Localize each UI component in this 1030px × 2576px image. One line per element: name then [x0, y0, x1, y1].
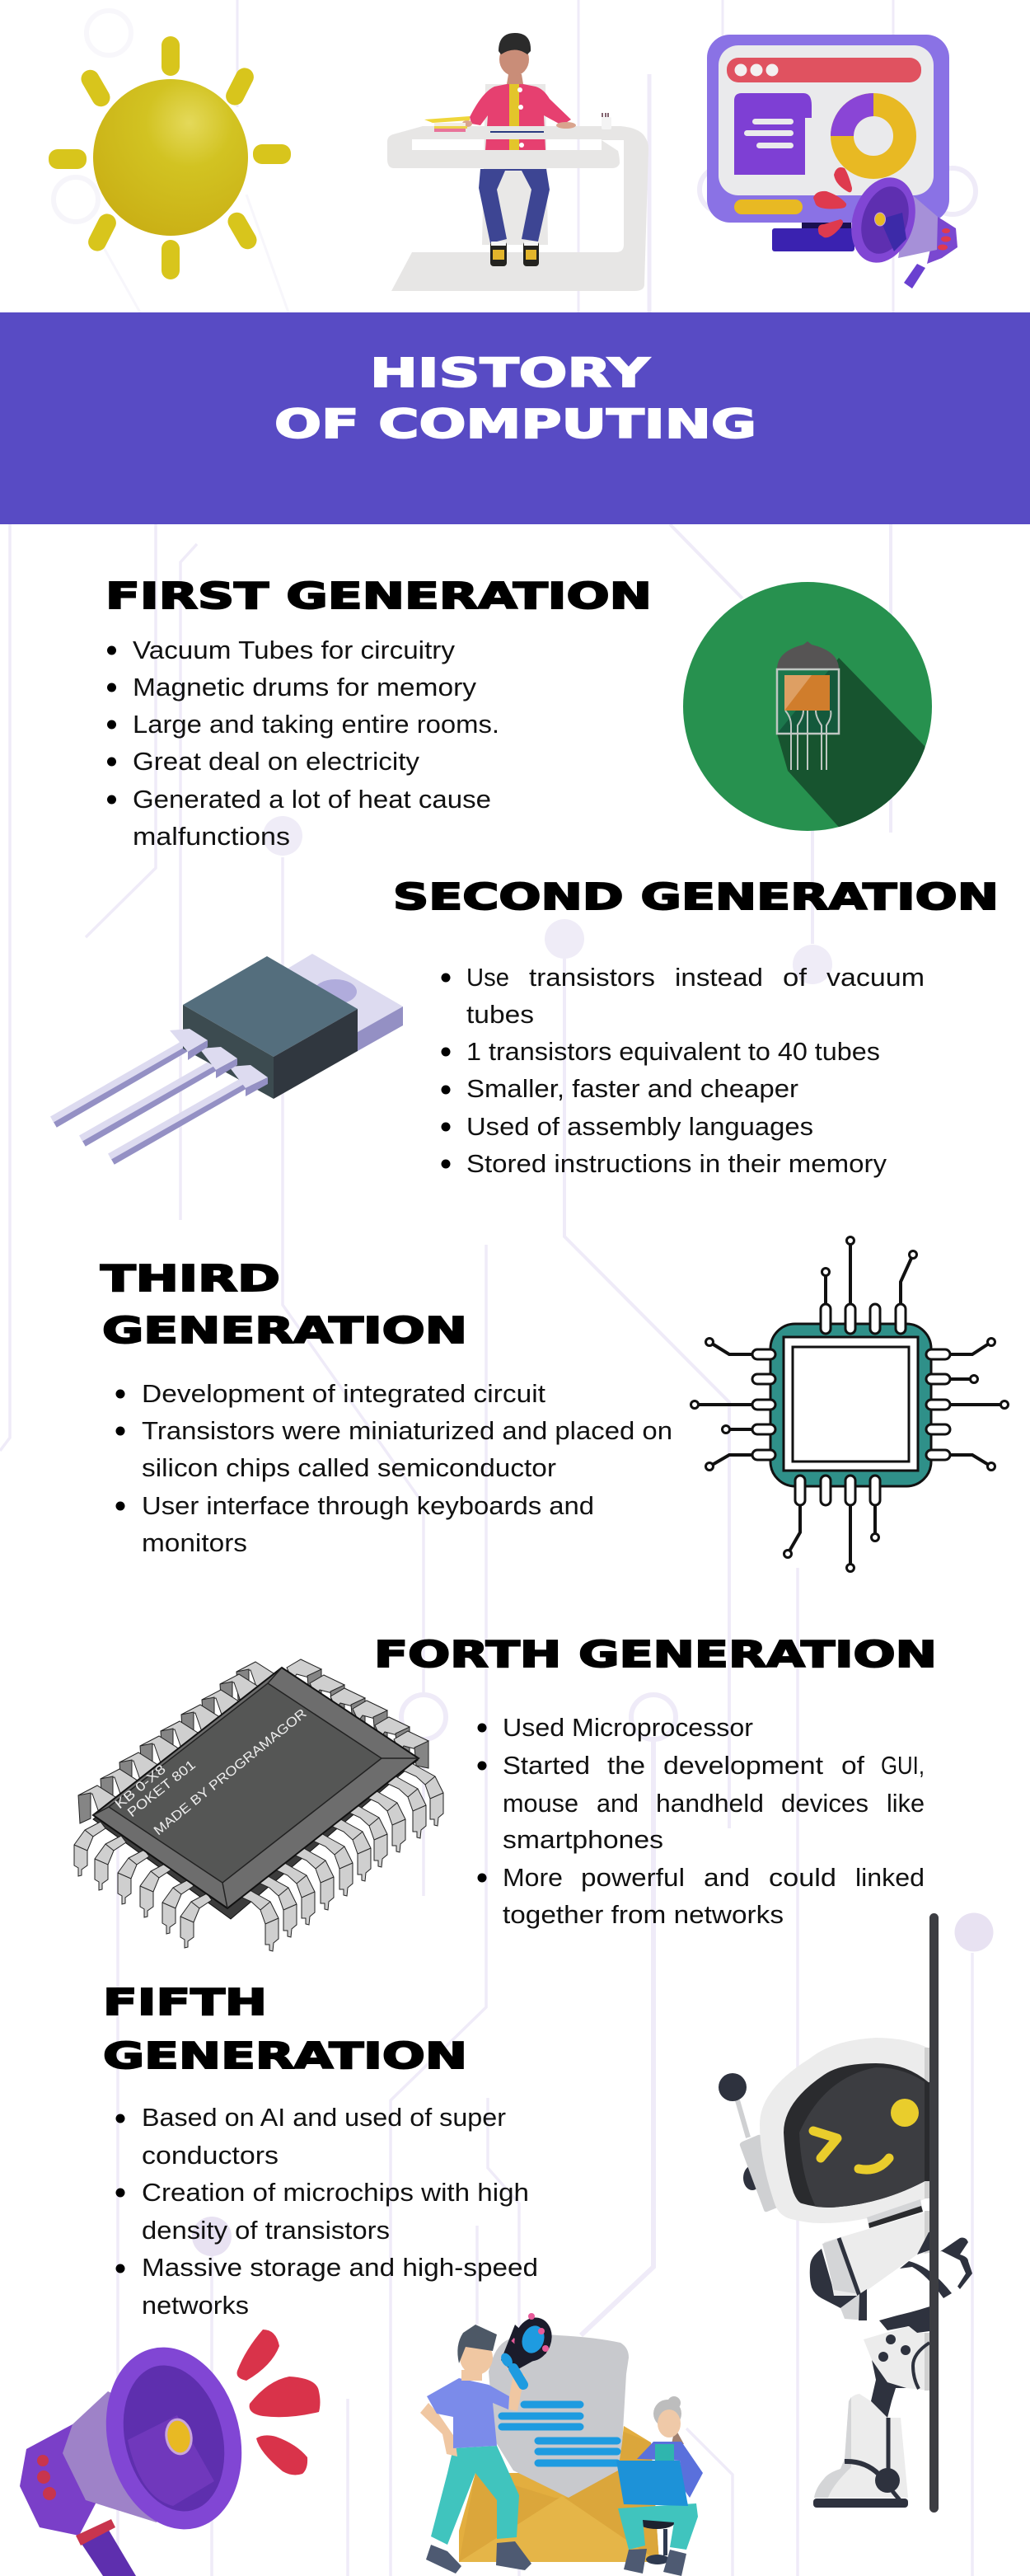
bullet list: fifth generation: Massive storage and high-speed: [142, 2253, 538, 2282]
bullet list: fourth generation: Started: [503, 1751, 590, 1780]
bullet list: first generation: Vacuum Tubes for circuitry: [133, 636, 456, 664]
pole: [929, 1913, 939, 2513]
bullet list: fourth generation: smartphones: [503, 1825, 663, 1854]
heading: fifth generation: [103, 1982, 467, 2077]
bullet list: fourth generation: devices: [781, 1789, 868, 1818]
bullet list: third generation: silicon chips called semiconductor: [142, 1453, 556, 1482]
icon: transistor: [52, 954, 403, 1161]
bullet list: first generation: [107, 636, 499, 851]
heading: second generation: SECOND GENERATION: [393, 876, 999, 918]
icon: microprocessor chip: POKET 801: [125, 1758, 199, 1820]
bullet list: second generation: Use: [466, 963, 509, 992]
illustration: people with envelope and document: [420, 2312, 703, 2576]
bullet list: third generation: monitors: [142, 1528, 247, 1557]
bullet list: second generation: Used of assembly languages: [466, 1112, 813, 1141]
bullet list: second generation: tubes: [466, 1000, 534, 1029]
bullet list: second generation: Smaller, faster and cheaper: [466, 1074, 798, 1103]
heading: fifth generation: GENERATION: [103, 2035, 467, 2077]
icon: microprocessor chip: KB 0-X8: [113, 1762, 169, 1812]
bullet list: fourth generation: development: [663, 1751, 823, 1780]
bullet list: fourth generation: could: [769, 1863, 836, 1892]
bullet list: third generation: User interface through keyboards and: [142, 1491, 594, 1520]
heading: first generation: FIRST GENERATION: [105, 575, 652, 617]
heading: third generation: THIRD: [101, 1258, 280, 1300]
bullet list: first generation: Generated a lot of heat cause: [133, 785, 491, 814]
icon: microprocessor chip: [74, 1659, 443, 1951]
bullet list: fourth generation: More: [503, 1863, 563, 1892]
title text: OF COMPUTING: [274, 401, 756, 448]
icon: vacuum tube on green circle: [683, 582, 939, 833]
heading: third generation: GENERATION: [102, 1310, 467, 1352]
bullet list: fourth generation: [478, 1713, 925, 1929]
bullet list: fourth generation: together from networks: [503, 1900, 784, 1929]
title text: HISTORY: [370, 350, 651, 396]
bullet list: third generation: [115, 1379, 672, 1557]
bullet list: fourth generation: GUI,: [881, 1751, 925, 1780]
bullet list: second generation: 1 transistors equivalent to 40 tubes: [466, 1037, 880, 1066]
bullet list: first generation: malfunctions: [133, 822, 290, 851]
illustration: dashboard monitor with megaphone: [707, 35, 957, 289]
bullet list: first generation: Great deal on electricity: [133, 747, 420, 776]
bullet list: third generation: Development of integrated circuit: [142, 1379, 545, 1408]
bullet list: first generation: Large and taking entire rooms.: [133, 710, 499, 739]
illustration: person at desk: [387, 33, 648, 291]
title band: [0, 312, 1030, 524]
heading: third generation: [101, 1258, 467, 1352]
bullet list: third generation: Transistors were miniaturized and placed on: [142, 1416, 672, 1445]
icon: microprocessor chip: MADE BY PROGRAMAGOR: [152, 1706, 310, 1838]
bullet list: fourth generation: handheld: [656, 1789, 764, 1818]
bullet list: fifth generation: [115, 2103, 538, 2320]
heading: fifth generation: FIFTH: [103, 1982, 267, 2024]
bullet list: second generation: [442, 963, 925, 1178]
bullet list: fourth generation: and: [704, 1863, 750, 1892]
icon: integrated circuit chip: [691, 1236, 1009, 1571]
bullet list: fourth generation: Used Microprocessor: [503, 1713, 753, 1742]
bullet list: fourth generation: of: [841, 1751, 864, 1780]
panel: fifth generation: [103, 1982, 538, 2320]
bullet list: fourth generation: powerful: [581, 1863, 685, 1892]
panel: third generation: [101, 1236, 1009, 1571]
bullet list: second generation: Stored instructions in their memory: [466, 1149, 887, 1178]
bullet list: fifth generation: Based on AI and used of super: [142, 2103, 506, 2132]
illustration: purple megaphone: [20, 2330, 320, 2576]
panel: fourth generation: [74, 1634, 937, 1951]
bullet list: second generation: transistors: [529, 963, 655, 992]
bullet list: fourth generation: mouse: [503, 1789, 578, 1818]
icon: 3D sun: [49, 36, 291, 279]
bullet list: first generation: Magnetic drums for memory: [133, 673, 477, 701]
bullet list: fourth generation: like: [887, 1789, 925, 1818]
heading: forth generation: FORTH GENERATION: [374, 1634, 937, 1676]
bullet list: fourth generation: and: [597, 1789, 639, 1818]
bullet list: fifth generation: networks: [142, 2291, 249, 2320]
bullet list: second generation: of: [783, 963, 807, 992]
bullet list: fifth generation: density of transistors: [142, 2216, 390, 2245]
bullet list: second generation: vacuum: [826, 963, 925, 992]
title text: [274, 350, 756, 448]
panel: second generation: [52, 876, 999, 1178]
illustration: robot peeking around pole: [719, 1913, 972, 2513]
bullet list: fourth generation: the: [607, 1751, 645, 1780]
bullet list: second generation: instead: [675, 963, 763, 992]
bullet list: fourth generation: linked: [855, 1863, 925, 1892]
bullet list: fifth generation: conductors: [142, 2141, 279, 2170]
bullet list: fifth generation: Creation of microchips with high: [142, 2178, 529, 2207]
panel: first generation: [105, 575, 939, 851]
